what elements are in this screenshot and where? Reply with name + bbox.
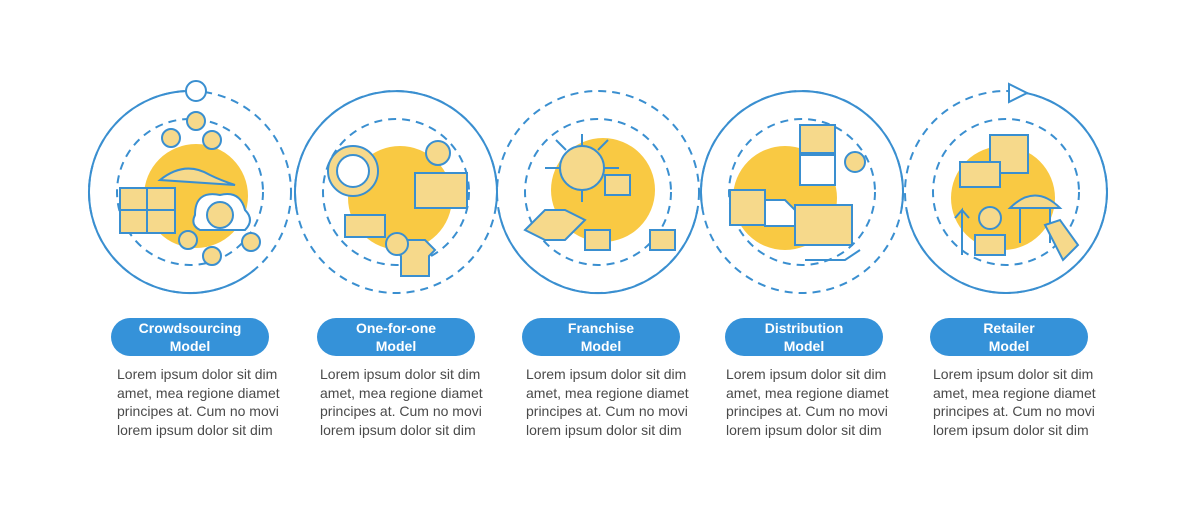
text: distribution: Lorem ipsum dolor sit dim amet, mea regione diamet principes at. Cum no movi lorem ipsum dolor sit dim — [726, 366, 889, 438]
pill: One-for-one Model: Model — [376, 338, 416, 354]
circle 1: crowdsourcing — [89, 81, 291, 293]
pill: Franchise Model: Model — [581, 338, 621, 354]
pill: Distribution Model — [725, 318, 883, 356]
pill: Distribution Model: Model — [784, 338, 824, 354]
text: crowdsourcing: Lorem ipsum dolor sit dim amet, mea regione diamet principes at. Cum no movi lorem ipsum dolor sit dim — [117, 366, 280, 438]
circle 3: franchise — [497, 91, 699, 293]
text: one-for-one: Lorem ipsum dolor sit dim amet, mea regione diamet principes at. Cum no movi lorem ipsum dolor sit dim — [320, 366, 483, 438]
pill: One-for-one Model — [317, 318, 475, 356]
pill: Crowdsourcing Model: Crowdsourcing — [139, 320, 241, 336]
pill: Franchise Model — [522, 318, 680, 356]
pill: Retailer Model — [930, 318, 1088, 356]
pill: Franchise Model: Franchise — [568, 320, 634, 336]
pill: Retailer Model: Model — [989, 338, 1029, 354]
text: retailer: Lorem ipsum dolor sit dim amet, mea regione diamet principes at. Cum no movi lorem ipsum dolor sit dim — [933, 366, 1096, 438]
circle 5: retailer — [905, 84, 1107, 293]
pill: Distribution Model: Distribution — [765, 320, 843, 336]
circle 4: distribution — [701, 91, 903, 293]
pill: One-for-one Model: One-for-one — [356, 320, 436, 336]
pill: Retailer Model: Retailer — [983, 320, 1035, 336]
pill: Crowdsourcing Model — [111, 318, 269, 356]
pill: Crowdsourcing Model: Model — [170, 338, 210, 354]
text: franchise: Lorem ipsum dolor sit dim amet, mea regione diamet principes at. Cum no movi lorem ipsum dolor sit dim — [526, 366, 689, 438]
circle 2: one-for-one — [295, 91, 497, 293]
